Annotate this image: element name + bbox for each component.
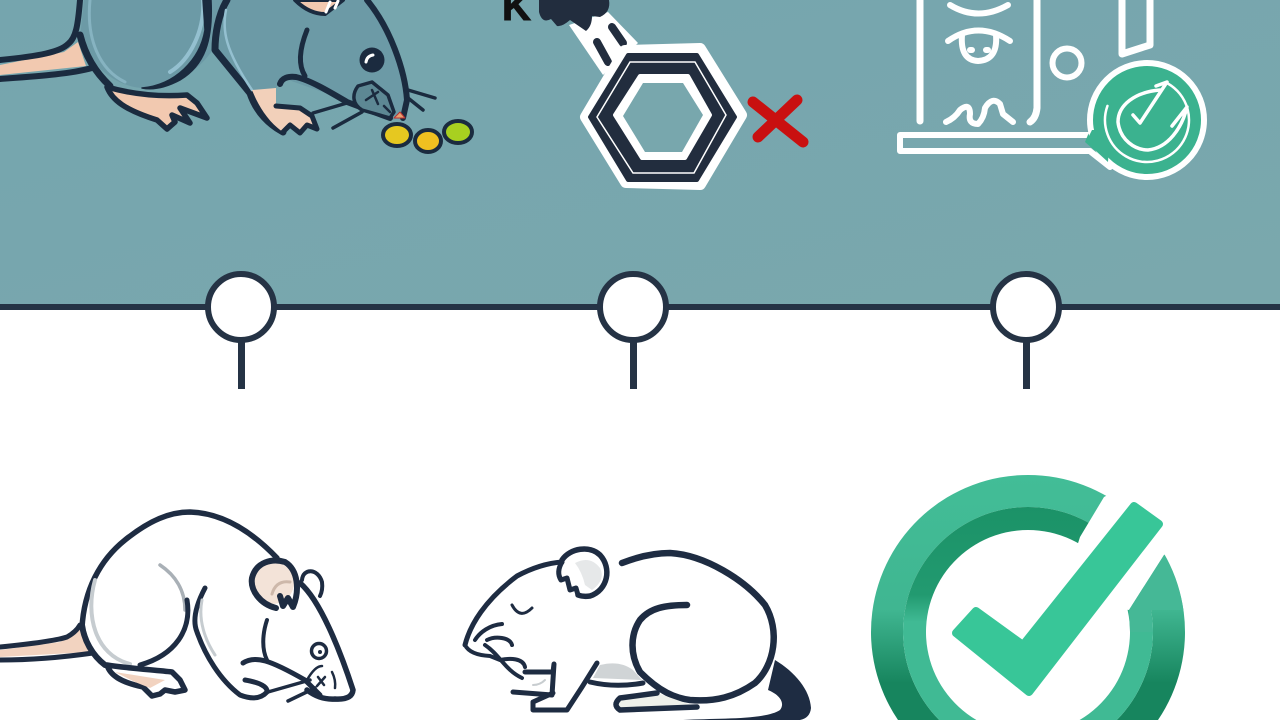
panel: teal upper band: [0, 0, 1280, 305]
eye: [312, 644, 326, 658]
eye: [360, 48, 384, 72]
timeline marker 3: [993, 274, 1059, 389]
icon: large green check badge: [871, 462, 1200, 720]
icon: white line-art document with green check badge: [900, 0, 1204, 177]
pills: [383, 121, 472, 152]
icon: teal mouse eating pills: [0, 0, 472, 152]
green check badge: [1085, 63, 1204, 177]
back foot: [107, 87, 207, 129]
timeline marker 2: [600, 274, 666, 389]
icon: chemical ring with dark blob and red cross: [502, 0, 803, 184]
red cross: [753, 100, 803, 142]
icon: white mouse sniffing: [0, 512, 353, 701]
timeline marker 1: [208, 274, 274, 389]
ear: [252, 561, 297, 608]
icon: white mouse sleeping: [465, 549, 811, 720]
timeline axis: [0, 274, 1280, 389]
check mark: [956, 506, 1159, 692]
